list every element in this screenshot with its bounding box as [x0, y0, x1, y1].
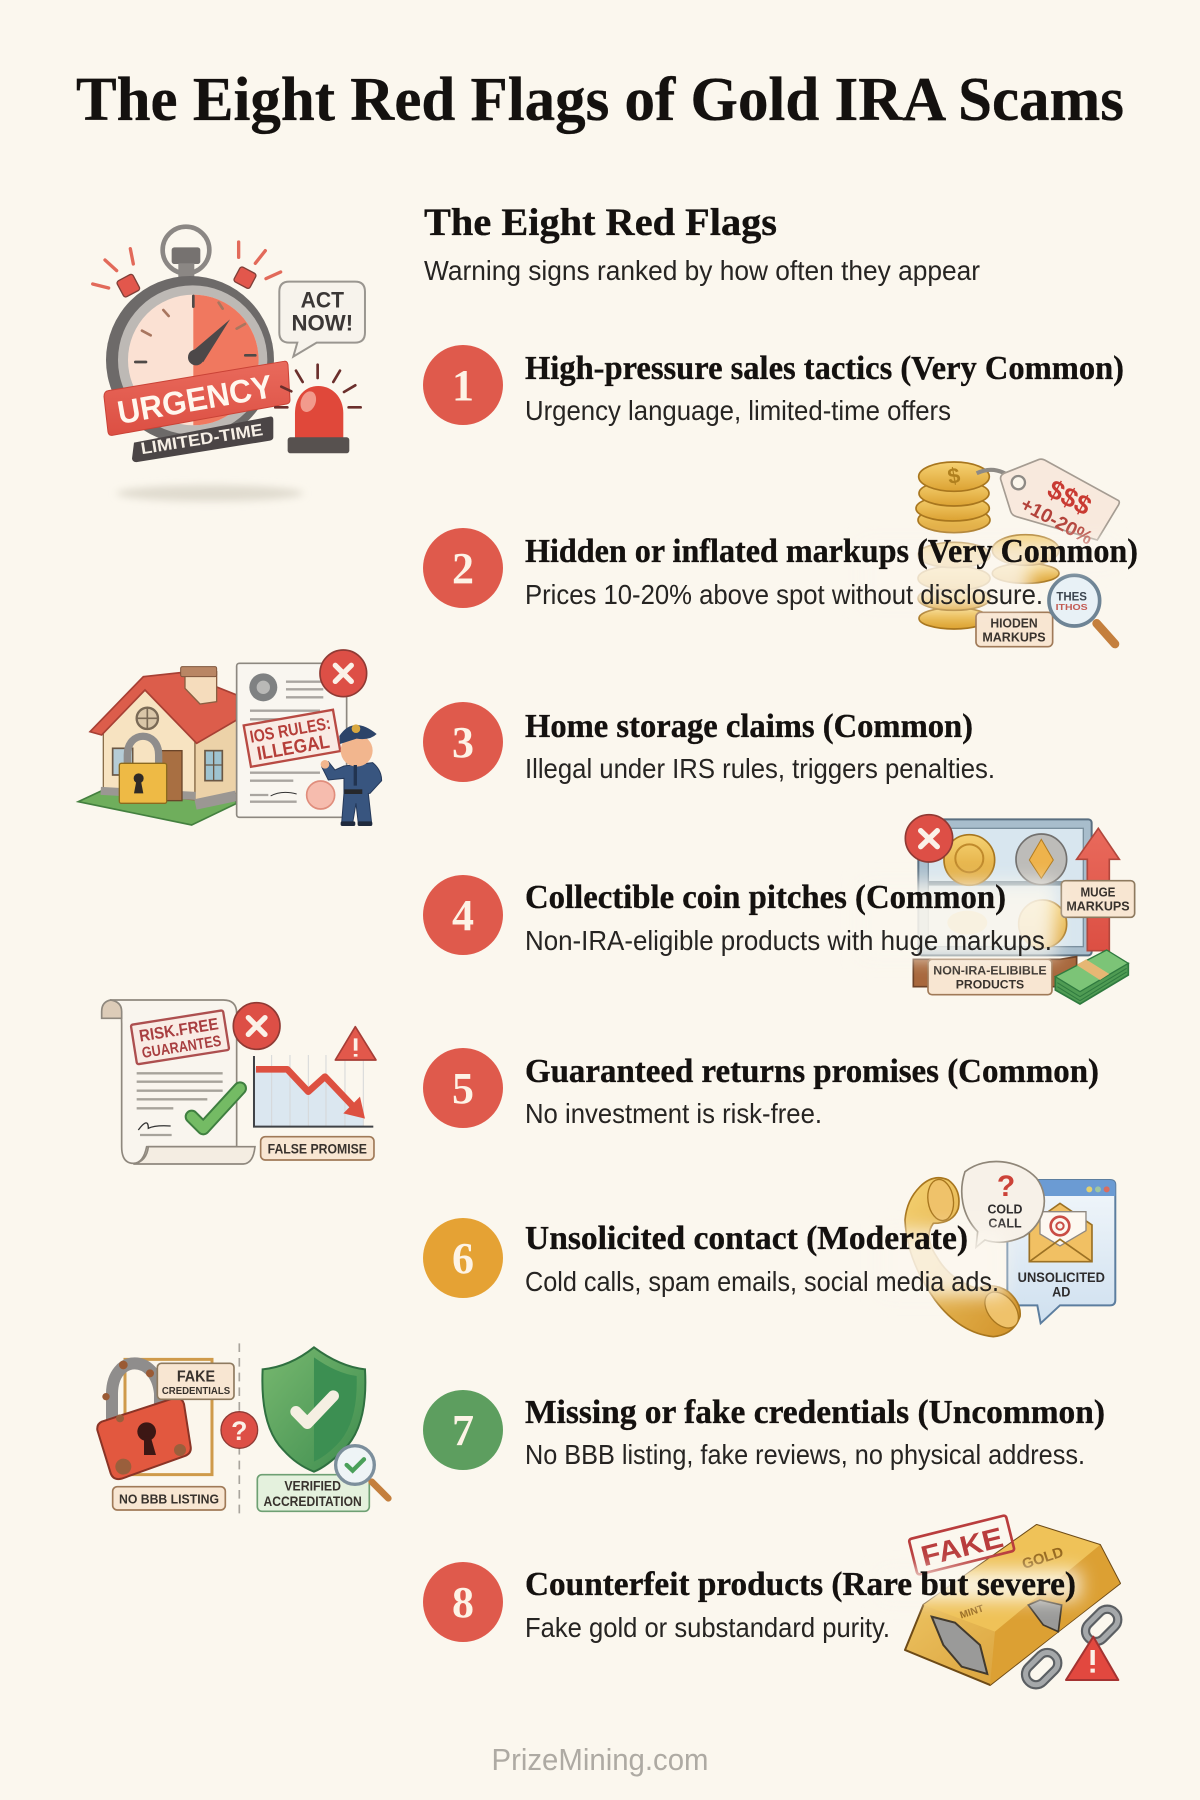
flag 3: Home storage claims (Common)	[525, 708, 973, 745]
icon: coins with hidden markups: THES	[1056, 590, 1087, 604]
icon: urgency stopwatch and alarm: NOW!	[291, 311, 353, 336]
title: The Eight Red Flags of Gold IRA Scams	[76, 66, 1124, 134]
icon: urgency stopwatch and alarm: ACT	[301, 287, 345, 312]
text backdrop glows	[860, 540, 1115, 1600]
icon: urgency stopwatch and alarm: LIMITED-TIME	[139, 420, 264, 458]
flag 5: Guaranteed returns promises (Common)	[525, 1053, 1099, 1090]
flag 6: 6	[452, 1234, 474, 1283]
flag 1: Urgency language, limited-time offers	[525, 395, 951, 426]
icon: cold call phone and unsolicited ad: CALL	[988, 1216, 1022, 1231]
flag 7: 7	[452, 1406, 474, 1455]
flag 8: Fake gold or substandard purity.	[525, 1612, 890, 1643]
flag 8: 8	[452, 1578, 474, 1627]
icon: cold call phone and unsolicited ad: ?	[997, 1170, 1015, 1203]
icon: counterfeit gold bar	[905, 1515, 1122, 1689]
flag 2: 2	[452, 544, 474, 593]
icon: risk-free guarantee scroll and falling chart	[102, 1000, 376, 1164]
flag 1: High-pressure sales tactics (Very Common)	[525, 350, 1124, 387]
icon: collectible coin case: MARKUPS	[1066, 899, 1130, 914]
icon: urgency stopwatch and alarm	[93, 227, 365, 501]
flag 3: Illegal under IRS rules, triggers penalties.	[525, 753, 995, 784]
flag 2: Prices 10-20% above spot without disclosure.	[525, 579, 1043, 610]
icon: house and IRS rules document: IOS RULES:	[248, 713, 332, 747]
icon: risk-free guarantee scroll and falling chart: RISK.FREE	[138, 1014, 220, 1046]
icon: counterfeit gold bar: FAKE	[918, 1522, 1007, 1573]
icon: collectible coin case: MUGE	[1080, 885, 1116, 900]
icon: house and IRS rules document	[78, 650, 382, 826]
flag 4	[423, 875, 1052, 956]
flag 6: Unsolicited contact (Moderate)	[525, 1220, 968, 1257]
icon: collectible coin case: PRODUCTS	[956, 978, 1024, 992]
icon: counterfeit gold bar: GOLD	[1020, 1545, 1066, 1573]
icon: fake credentials vs verified accreditation: CREDENTIALS	[162, 1386, 230, 1397]
icon: risk-free guarantee scroll and falling chart: FALSE PROMISE	[268, 1140, 367, 1156]
icon: cold call phone and unsolicited ad	[905, 1162, 1115, 1337]
flag 1: 1	[452, 361, 474, 410]
icon: fake credentials vs verified accreditation: ACCREDITATION	[263, 1493, 362, 1509]
icon: cold call phone and unsolicited ad: UNSOLICITED	[1018, 1269, 1105, 1285]
icon: fake credentials vs verified accreditation: VERIFIED	[284, 1478, 341, 1494]
flag 3: 3	[452, 718, 474, 767]
icon: coins with hidden markups: MARKUPS	[982, 629, 1046, 644]
icon: collectible coin case: NON-IRA-ELIBIBLE	[933, 964, 1047, 978]
icon: coins with hidden markups: +10-20%	[1017, 494, 1096, 550]
icon: coins with hidden markups	[916, 459, 1119, 647]
icon: cold call phone and unsolicited ad: AD	[1052, 1284, 1070, 1300]
icon: collectible coin case	[905, 815, 1135, 1004]
section subheading: Warning signs ranked by how often they appear	[424, 255, 980, 286]
icon: coins with hidden markups: HIODEN	[990, 615, 1038, 630]
icon: cold call phone and unsolicited ad: COLD	[987, 1201, 1023, 1216]
flag 7	[423, 1390, 1105, 1470]
icon: urgency stopwatch and alarm: URGENCY	[114, 367, 275, 431]
flag 7: Missing or fake credentials (Uncommon)	[525, 1394, 1105, 1431]
flag 8: Counterfeit products (Rare but severe)	[525, 1566, 1076, 1603]
icon: counterfeit gold bar: MINT	[959, 1603, 985, 1621]
icon: house and IRS rules document: ILLEGAL	[255, 732, 331, 765]
flag 6: Cold calls, spam emails, social media ads.	[525, 1266, 999, 1297]
icon: coins with hidden markups: $	[946, 462, 962, 489]
icon: fake credentials vs verified accreditation: FAKE	[177, 1368, 215, 1385]
flag 5: 5	[452, 1064, 474, 1113]
flag 5	[423, 1048, 1099, 1129]
footer source: PrizeMining.com	[492, 1742, 708, 1777]
section heading: The Eight Red Flags	[424, 201, 777, 244]
flag 4: Non-IRA-eligible products with huge markups.	[525, 925, 1052, 956]
flag 3	[423, 702, 995, 784]
flag 5: No investment is risk-free.	[525, 1098, 822, 1129]
flag 2: Hidden or inflated markups (Very Common)	[525, 533, 1138, 570]
flag 4: Collectible coin pitches (Common)	[525, 879, 1006, 916]
flag 1	[423, 345, 1124, 426]
icon: coins with hidden markups: ITHOS	[1056, 603, 1089, 612]
flag 8	[423, 1562, 1076, 1643]
icon: coins with hidden markups: $$$	[1043, 474, 1097, 521]
icon: fake credentials vs verified accreditation: NO BBB LISTING	[119, 1491, 219, 1506]
icon: fake credentials vs verified accreditation: ?	[231, 1416, 247, 1446]
flag 2	[423, 528, 1138, 610]
icon: fake credentials vs verified accreditation	[97, 1343, 388, 1518]
flag 6	[423, 1218, 999, 1298]
icon: risk-free guarantee scroll and falling chart: GUARANTES	[141, 1033, 222, 1062]
flag 4: 4	[452, 891, 474, 940]
flag 7: No BBB listing, fake reviews, no physical address.	[525, 1439, 1085, 1470]
